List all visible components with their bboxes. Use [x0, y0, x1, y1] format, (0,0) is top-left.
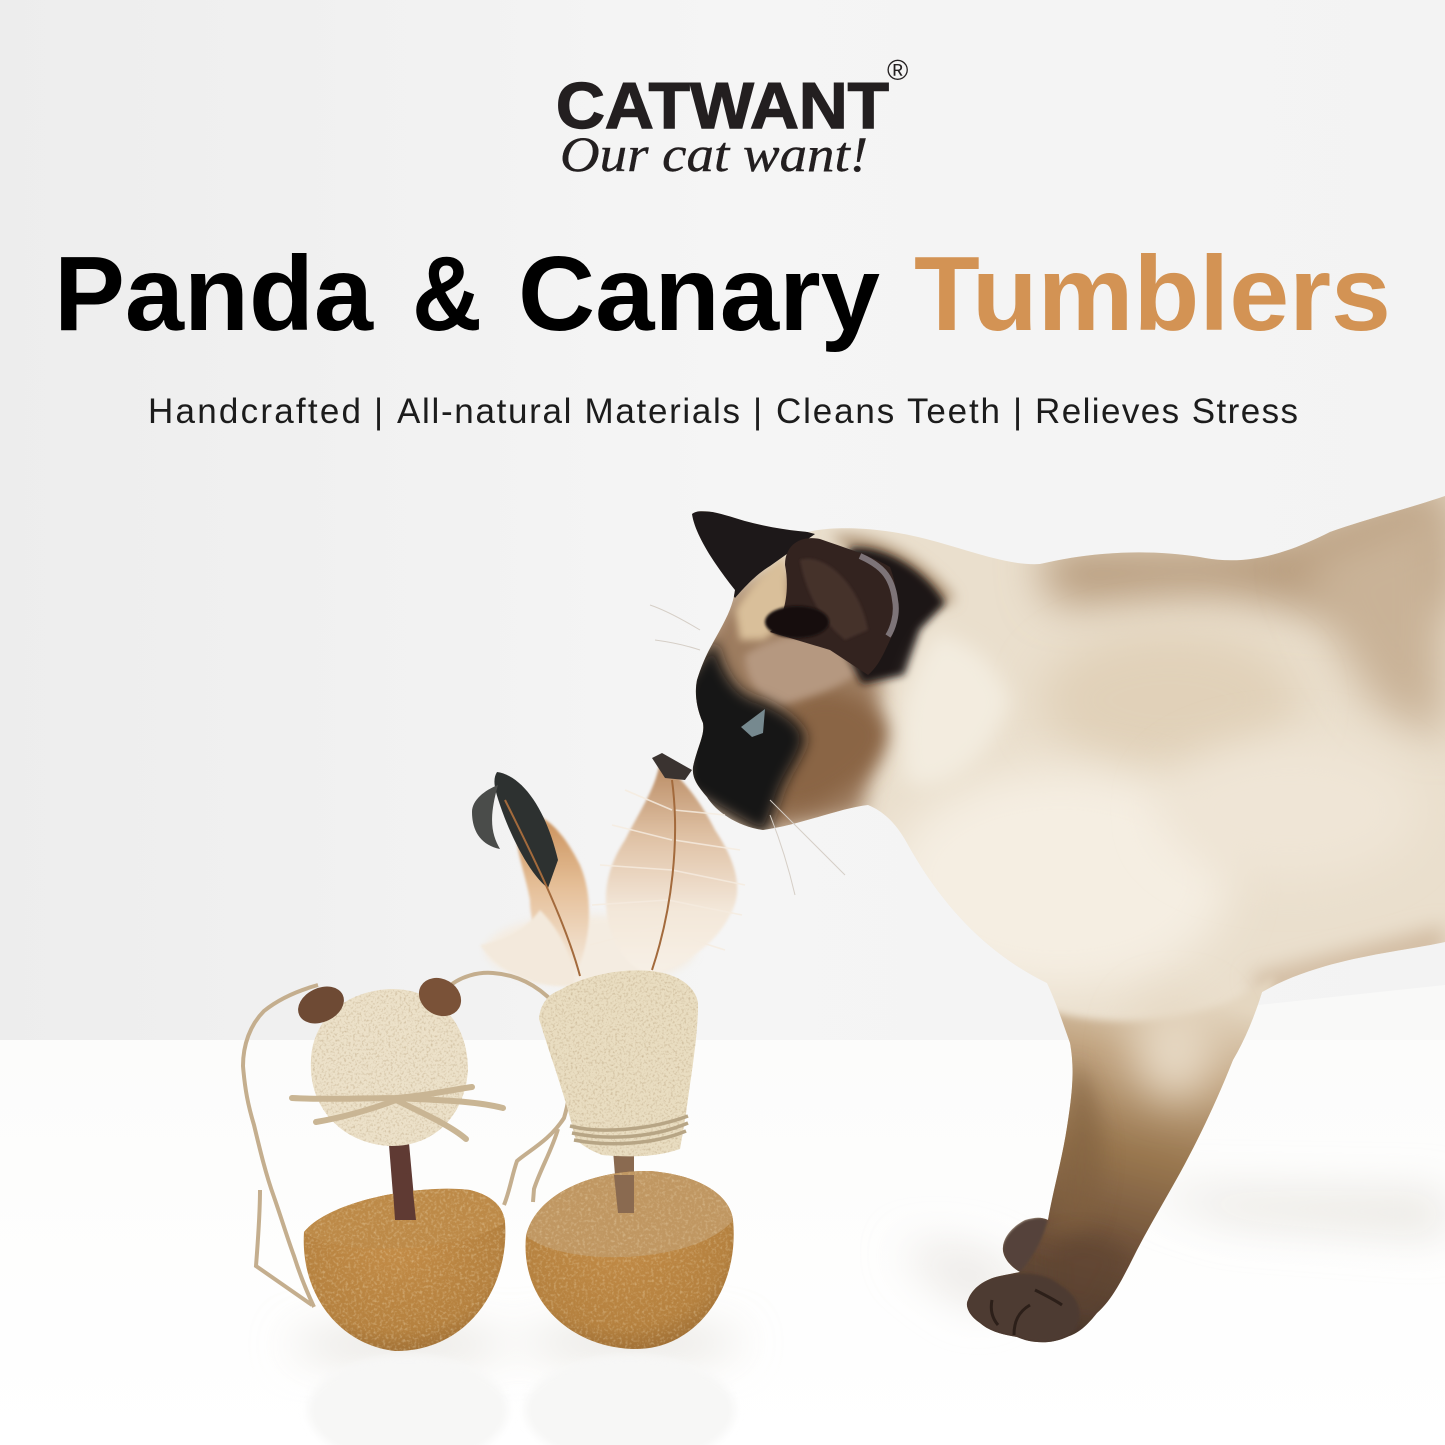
logo: CATWANT: [556, 55, 908, 182]
feathers: [472, 753, 745, 986]
title: Canary: [518, 235, 880, 353]
right feather: [606, 762, 737, 972]
soft fluff at feather base: [485, 915, 695, 985]
title: Panda: [54, 235, 374, 353]
right feather barbs: [590, 790, 745, 950]
loofah head: [311, 989, 468, 1146]
cork grain: [304, 1189, 506, 1351]
registered mark: ®: [887, 55, 908, 87]
white table surface: [0, 985, 1445, 1445]
brand name: CATWANT: [556, 69, 889, 142]
twine wrap: [570, 1116, 688, 1144]
feather quills: [505, 780, 675, 976]
paw toe lines: [991, 1290, 1062, 1335]
subtitle: |: [374, 392, 383, 431]
cat: [650, 480, 1445, 1350]
twine loops: [243, 973, 571, 1307]
cat fur shading: [685, 480, 1445, 1350]
mid flank beige: [1040, 630, 1300, 770]
right ear acorn: [412, 970, 468, 1024]
ear rim: [860, 556, 896, 636]
darker leg side: [1049, 1066, 1104, 1213]
light chest: [890, 770, 1230, 990]
loofah texture: [539, 970, 698, 1156]
loofah texture: [311, 990, 468, 1146]
cream ruff: [902, 632, 1010, 786]
right ear: [770, 538, 897, 675]
cork half ball: [304, 1189, 505, 1351]
brown nape: [830, 536, 955, 610]
left ear acorn: [292, 979, 350, 1031]
stick: [613, 1150, 634, 1213]
subtitle: Handcrafted: [148, 392, 361, 431]
back paw: [1003, 1218, 1048, 1272]
title: [54, 235, 1391, 353]
left ear: [690, 511, 815, 598]
front paw: [967, 1274, 1080, 1342]
front leg: [960, 975, 1275, 1350]
tan head base: [690, 575, 880, 835]
dark muzzle: [685, 640, 805, 835]
toy reflections: [308, 1355, 735, 1445]
subtitle: [148, 392, 1298, 431]
twine bow: [292, 1087, 503, 1139]
subtitle: |: [753, 392, 762, 431]
stick: [389, 1143, 416, 1220]
light brow patch: [735, 555, 790, 640]
cat silhouette: [692, 496, 1445, 1342]
feather tip near nose: [652, 753, 692, 780]
subtitle: |: [1013, 392, 1022, 431]
title: Tumblers: [914, 235, 1391, 353]
left orange feather: [517, 814, 589, 975]
cork grain: [526, 1171, 734, 1349]
whiskers: [650, 605, 845, 895]
inner ear sheen: [800, 559, 868, 640]
loofah body: [539, 970, 698, 1156]
subtitle: Cleans Teeth: [776, 392, 1000, 431]
stick over cork: [392, 1173, 416, 1220]
taupe forehead: [743, 636, 857, 706]
bright shoulder: [1187, 735, 1381, 856]
dark feather vane: [494, 772, 558, 888]
left fluff: [480, 910, 575, 986]
lower belly shade: [1250, 925, 1445, 1000]
background wall: [0, 0, 1445, 1040]
grey hook of feather: [472, 785, 500, 849]
dark neck band: [830, 548, 945, 684]
soft shadow beneath toys: [290, 1333, 742, 1355]
stick over cork: [614, 1175, 634, 1213]
subtitle: All-natural Materials: [397, 392, 740, 431]
brown cheek fading to cream: [770, 691, 890, 815]
canary tumbler: [526, 970, 734, 1349]
tagline: Our cat want!: [560, 126, 868, 182]
back tan shading: [1040, 480, 1445, 610]
light leg highlight: [1133, 1000, 1217, 1100]
lower leg dark: [1060, 1234, 1132, 1320]
cat shadow on table: [900, 1190, 1445, 1310]
subtitle: Relieves Stress: [1035, 392, 1298, 431]
right flank shading: [1300, 500, 1445, 740]
cork top surface: [304, 1189, 505, 1249]
cork top surface: [526, 1171, 733, 1257]
panda tumbler: [292, 970, 515, 1360]
title: &: [412, 235, 482, 353]
cork half ball: [526, 1171, 734, 1349]
under-ear shadow: [765, 606, 829, 638]
grey blue eye: [741, 709, 765, 737]
